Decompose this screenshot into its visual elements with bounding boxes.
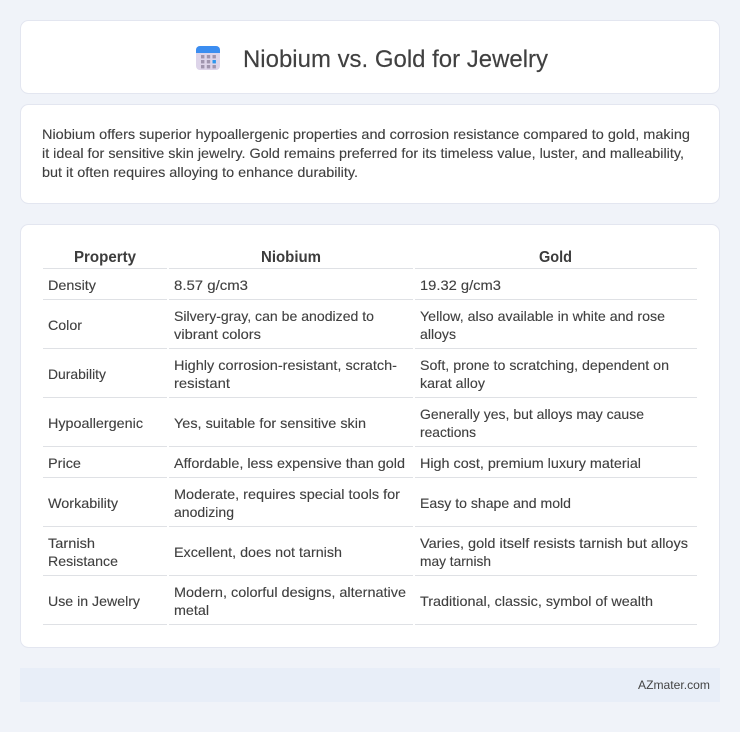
row: durability: karat alloy: [420, 375, 485, 391]
summary panel: [20, 104, 720, 204]
row: hypoallergenic: reactions: [420, 424, 476, 440]
row: price: High cost, premium luxury material: [420, 455, 641, 471]
row: durability: Highly corrosion-resistant, scratch-: [174, 357, 397, 373]
row: tarnish resistance: [48, 535, 688, 569]
row: tarnish resistance: Excellent, does not tarnish: [174, 544, 342, 560]
row: hypoallergenic: Hypoallergenic: [48, 415, 143, 431]
row: tarnish resistance: Tarnish: [48, 535, 95, 551]
row: use in jewelry: Traditional, classic, symbol of wealth: [420, 593, 653, 609]
table header: Gold: [539, 249, 572, 266]
row: workability: Workability: [48, 495, 118, 511]
row: tarnish resistance: Resistance: [48, 553, 118, 569]
row: color: alloys: [420, 326, 456, 342]
row: hypoallergenic: Yes, suitable for sensitive skin: [174, 415, 366, 431]
row: tarnish resistance: Varies, gold itself resists tarnish but alloys: [420, 535, 688, 551]
row: color: Color: [48, 317, 82, 333]
icon: calendar: [196, 46, 220, 70]
row: durability: Soft, prone to scratching, dependent on: [420, 357, 669, 373]
row: price: [48, 455, 641, 471]
row: hypoallergenic: Generally yes, but alloys may cause: [420, 406, 644, 422]
row: color: Yellow, also available in white and rose: [420, 308, 665, 324]
summary text: Niobium offers superior hypoallergenic properties and corrosion resistance compared to gold, making: [42, 126, 690, 142]
table header: [74, 249, 572, 266]
row: tarnish resistance: may tarnish: [420, 553, 491, 569]
row: color: vibrant colors: [174, 326, 261, 342]
row: durability: resistant: [174, 375, 230, 391]
row: price: Price: [48, 455, 81, 471]
row: workability: anodizing: [174, 504, 234, 520]
row: durability: [48, 357, 669, 391]
row: workability: Easy to shape and mold: [420, 495, 571, 511]
row: density: [48, 277, 501, 293]
table header: Niobium: [261, 249, 321, 266]
row: density: 19.32 g/cm3: [420, 277, 501, 293]
summary text: but it often requires alloying to enhance durability.: [42, 164, 358, 180]
row: use in jewelry: Modern, colorful designs, alternative: [174, 584, 406, 600]
title: Niobium vs. Gold for Jewelry: [243, 46, 548, 73]
summary text: it ideal for sensitive skin jewelry. Gold remains preferred for its timeless value, luster, and malleability,: [42, 145, 684, 161]
row: workability: Moderate, requires special tools for: [174, 486, 400, 502]
header panel: [20, 20, 720, 94]
footer bar: [20, 668, 720, 702]
row: density: 8.57 g/cm3: [174, 277, 248, 293]
row: density: Density: [48, 277, 96, 293]
row: workability: [48, 486, 571, 520]
row: color: Silvery-gray, can be anodized to: [174, 308, 374, 324]
table header: Property: [74, 249, 136, 266]
row: use in jewelry: metal: [174, 602, 209, 618]
row: durability: Durability: [48, 366, 106, 382]
comparison table panel: [20, 224, 720, 648]
row: use in jewelry: [48, 584, 653, 618]
row: use in jewelry: Use in Jewelry: [48, 593, 140, 609]
row: color: [48, 308, 665, 342]
row: hypoallergenic: [48, 406, 644, 440]
summary text: [42, 126, 690, 180]
row: price: Affordable, less expensive than gold: [174, 455, 405, 471]
footer credit: AZmater.com: [638, 678, 710, 692]
